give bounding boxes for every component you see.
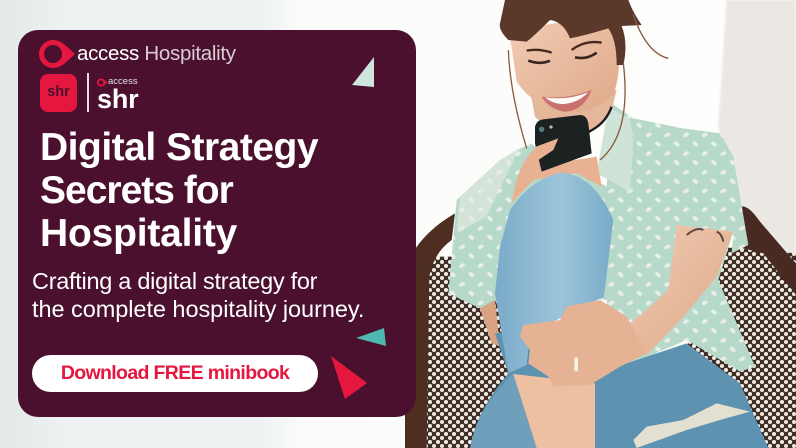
button: download: Download FREE minibook: [61, 362, 289, 384]
panel: main card: [18, 30, 416, 417]
arm: [617, 225, 733, 355]
subheading: [32, 268, 364, 322]
heading: Hospitality: [40, 212, 237, 255]
shirt: [448, 103, 755, 372]
other leg behind knee: [480, 300, 500, 347]
jeans lower: [470, 317, 768, 448]
phone and hand: [512, 115, 602, 203]
access Hospitality logo: [39, 40, 236, 68]
chair: [405, 207, 796, 448]
icon: shr tile: shr: [47, 84, 70, 100]
decorative triangles: [331, 57, 386, 399]
icon: shr tile: [40, 74, 77, 112]
heading: [40, 126, 318, 255]
button: download: [32, 355, 318, 392]
hand on leg: [520, 300, 647, 387]
heading: Secrets for: [40, 169, 233, 212]
raised knee jeans: [495, 173, 613, 373]
subheading: the complete hospitality journey.: [32, 296, 364, 322]
shr logo: [40, 73, 138, 114]
eyes and smile: [527, 42, 602, 53]
icon: access teardrop: [39, 40, 75, 68]
access shr wordmark: access: [108, 76, 138, 87]
heading: Digital Strategy: [40, 126, 318, 169]
hair: [500, 0, 642, 65]
subheading: Crafting a digital strategy for: [32, 268, 317, 294]
access shr wordmark: shr: [97, 84, 138, 114]
logo wordmark: access Hospitality: [77, 42, 236, 65]
neck and face: [500, 0, 668, 160]
logo divider: [87, 73, 88, 112]
